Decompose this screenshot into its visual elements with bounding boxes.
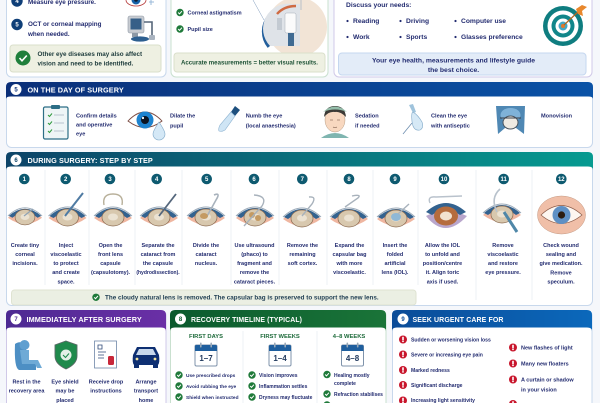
list: measurements	[176, 9, 242, 33]
list: urgent symptoms left: Severe or increasing eye pain	[411, 352, 483, 358]
header: immediately after surgery	[6, 310, 166, 331]
step 10: to unfold and	[425, 252, 460, 258]
column: 4-8 weeks: Healing mostly	[334, 373, 370, 379]
step 8: Expand the	[335, 243, 364, 249]
callout: eye health guide	[338, 53, 586, 75]
text: eye shield	[51, 380, 79, 403]
header: during surgery: 6	[14, 158, 18, 164]
column: first weeks: Vision improves	[259, 373, 298, 379]
text: clean the eye	[430, 114, 470, 129]
column: first days	[175, 334, 239, 401]
step 8: viscoelastic.	[333, 270, 366, 276]
step 2: viscoelastic	[50, 252, 82, 258]
header: during surgery	[6, 152, 593, 170]
step 4: 4	[155, 177, 159, 183]
list: urgent symptoms right	[509, 344, 574, 403]
text: numb the eye: (local anaesthesia)	[246, 123, 296, 129]
step 6	[234, 174, 276, 285]
callout: accurate measurements: Accurate measurements = better visual results.	[181, 59, 318, 66]
step 6: cataract pieces.	[234, 279, 276, 285]
step 2	[48, 174, 86, 285]
text: dilate the pupil: Dilate the	[170, 114, 195, 120]
step 1: incisions.	[12, 261, 38, 267]
column: first days: 1–7	[199, 354, 213, 363]
text: eye shield: may be	[56, 389, 74, 395]
step 2: and create	[52, 270, 80, 276]
text: dilate the pupil: pupil	[170, 123, 184, 129]
list: measurements: Pupil size	[188, 27, 213, 33]
text: confirm details: eye	[76, 132, 85, 138]
header: recovery timeline	[170, 310, 386, 331]
header: on the day of surgery: 5	[14, 88, 18, 94]
column: 4-8 weeks: 4–8 WEEKS	[333, 334, 365, 340]
list: urgent symptoms right: New flashes of light	[521, 346, 573, 352]
icon: car	[133, 347, 159, 368]
icon: recovery chair	[15, 340, 42, 370]
icon: drop instructions	[94, 341, 116, 368]
callout: capsular bag preserved	[12, 290, 416, 305]
step 12: Check wound	[543, 243, 579, 249]
text: sedation: if needed	[355, 123, 380, 129]
text: sedation: Sedation	[355, 114, 379, 120]
step 6: Use ultrasound	[234, 243, 275, 249]
text: sedation	[355, 114, 380, 129]
step 12: speculum.	[547, 280, 575, 286]
text: eye shield: Eye shield	[51, 380, 79, 386]
step 4: cataract from	[141, 252, 176, 258]
header: recovery timeline: RECOVERY TIMELINE (TYPICAL)	[191, 317, 302, 324]
step 12: Remove	[550, 270, 572, 276]
step 5: Divide the	[193, 243, 219, 249]
list: urgent symptoms left	[399, 336, 491, 403]
text: confirm details: and operative	[76, 122, 112, 128]
step 10: position/centre	[423, 261, 462, 267]
step 3: 3	[108, 177, 112, 183]
step 1: Create tiny	[11, 243, 40, 249]
step 1	[8, 174, 42, 267]
step 1: 1	[23, 177, 27, 183]
panel: immediately after surgery	[6, 310, 166, 403]
column: first weeks: Dryness may fluctuate	[259, 395, 313, 401]
step 8	[330, 174, 368, 276]
step 2: 2	[64, 177, 68, 183]
step 12: sealing and	[546, 252, 576, 258]
icon: target	[543, 5, 587, 46]
step 3: (capsulotomy).	[91, 270, 131, 276]
panel: during surgery step by step	[6, 152, 593, 306]
icon: OCT machine	[128, 16, 155, 42]
text: confirm details	[76, 113, 117, 138]
header: seek urgent care: 9	[401, 317, 405, 323]
step 5: OCT or corneal mapping	[11, 19, 102, 38]
list: needs: Work	[353, 34, 370, 41]
illustration: biometer	[253, 0, 327, 57]
header: immediately after surgery: IMMEDIATELY AFTER SURGERY	[26, 315, 142, 324]
text: dilate the pupil	[170, 114, 195, 129]
callout: eye health guide: the best choice.	[428, 67, 479, 74]
step 8: 8	[347, 177, 351, 183]
step 7: Remove the	[287, 243, 318, 249]
header: on the day of surgery	[6, 82, 593, 99]
icon: patient	[321, 106, 349, 138]
step 4: (hydrodissection).	[136, 270, 180, 276]
text: arrange transport: transport	[134, 389, 158, 395]
list: needs: Computer use	[461, 18, 506, 25]
text: rest in recovery area: Rest in the	[12, 380, 41, 386]
step 6: (phaco) to	[241, 252, 268, 258]
step 5	[187, 174, 225, 267]
list: urgent symptoms left: Sudden or worsening vision loss	[411, 337, 491, 343]
column: 4-8 weeks: complete	[334, 381, 356, 387]
step 10: 10	[441, 177, 448, 183]
step 10	[423, 174, 467, 285]
step 11: viscoelastic	[487, 252, 519, 258]
step 2: Inject	[59, 243, 73, 249]
panel: discuss your needs	[334, 0, 592, 77]
callout: other eye diseases: Other eye diseases may also affect	[38, 51, 143, 58]
text: rest in recovery area	[9, 380, 45, 395]
step 11: eye pressure.	[485, 270, 521, 276]
step 6: fragment and	[237, 261, 272, 267]
step 7: remaining	[289, 252, 316, 258]
step 6: remove the	[240, 270, 269, 276]
callout: capsular bag preserved: The cloudy natural lens is removed. The capsular bag is preserved to support the new lens.	[105, 294, 379, 301]
step 9	[377, 174, 415, 276]
text: drop instructions: Receive drop	[89, 380, 124, 386]
header: seek urgent care: SEEK URGENT CARE FOR	[412, 317, 504, 324]
list: urgent symptoms left: Marked redness	[411, 368, 450, 374]
step 9: artificial	[384, 261, 406, 267]
column: first weeks: 1–4	[273, 354, 287, 363]
callout: other eye diseases: vision and need to be identified.	[38, 60, 134, 68]
step 11	[483, 174, 521, 276]
list: needs: Glasses preference	[461, 34, 523, 41]
step 4: Separate the	[141, 243, 175, 249]
step 5: cataract	[195, 252, 217, 258]
step 5: OCT or corneal mapping: 5	[15, 23, 19, 29]
header: on the day of surgery: ON THE DAY OF SURGERY	[28, 85, 124, 94]
text: confirm details: Confirm details	[76, 113, 117, 119]
step 9: 9	[393, 177, 397, 183]
step 12: 12	[558, 177, 565, 183]
text: drop instructions: instructions	[90, 389, 122, 395]
step 12	[538, 174, 586, 286]
step 8: with more	[336, 261, 362, 267]
heading: discuss your needs: Discuss your needs:	[346, 2, 411, 9]
step 11: 11	[501, 177, 508, 183]
column: first weeks: Inflammation settles	[259, 384, 308, 390]
step 3: capsule	[100, 261, 121, 267]
column: first days: Shield when instructed	[186, 395, 239, 401]
step 3	[91, 174, 132, 276]
text: numb the eye	[246, 114, 296, 129]
step 1: corneal	[15, 252, 35, 258]
text: rest in recovery area: recovery area	[9, 389, 45, 395]
callout: eye health guide: Your eye health, measurements and lifestyle guide	[372, 58, 535, 64]
list: needs: Sports	[406, 34, 427, 41]
text: arrange transport	[134, 380, 158, 403]
list: measurements: Corneal astigmatism	[188, 10, 242, 16]
list: needs: Reading	[353, 18, 379, 25]
step 7: 7	[301, 177, 305, 183]
text: arrange transport: Arrange	[135, 380, 157, 386]
step 4	[136, 174, 180, 276]
panel: on the day of surgery	[6, 82, 593, 148]
column: 4-8 weeks	[323, 334, 383, 403]
step 2: space.	[57, 279, 75, 285]
step 10: axis if used.	[427, 279, 459, 285]
step 10: it. Align toric	[426, 270, 459, 276]
text: monovision: Monovision	[541, 114, 573, 120]
icon: eye pressure	[126, 0, 154, 6]
step 11: and restore	[488, 261, 518, 267]
panel: recovery timeline	[170, 310, 386, 403]
step 3: Open the	[99, 243, 122, 249]
step 7	[283, 174, 321, 267]
panel: seek urgent care	[392, 310, 592, 403]
step 5: 5	[205, 177, 209, 183]
step 9: lens (IOL).	[382, 270, 409, 276]
step 4: the capsule	[143, 261, 173, 267]
column: first days: Avoid rubbing the eye	[186, 384, 237, 390]
list: urgent symptoms right: A curtain or shadow	[521, 378, 574, 384]
step 9: Insert the	[383, 243, 407, 249]
icon: monovision	[496, 106, 525, 134]
step 6: 6	[252, 177, 256, 183]
step 5: nucleus.	[195, 261, 218, 267]
callout: accurate measurements	[174, 53, 325, 72]
step 10: Allow the IOL	[425, 243, 461, 249]
icon: numbing dropper	[219, 106, 240, 131]
step 12: give medication.	[539, 261, 583, 267]
panel: measurements	[171, 0, 328, 77]
column: first days: Use prescribed drops	[186, 373, 236, 379]
icon: antiseptic dropper	[403, 104, 423, 134]
column: 4-8 weeks: Refraction stabilises	[334, 392, 383, 398]
column: first weeks	[248, 334, 313, 401]
column: first days: FIRST DAYS	[189, 334, 223, 340]
step 8: capsular bag	[333, 252, 366, 258]
header: seek urgent care	[392, 310, 592, 331]
list: needs: Driving	[406, 18, 429, 25]
text: drop instructions	[89, 380, 124, 395]
step 7: soft cortex.	[288, 261, 318, 267]
column: 4-8 weeks: 4–8	[346, 354, 360, 363]
step 5: OCT or corneal mapping: when needed.	[27, 31, 70, 38]
list: urgent symptoms right: in your vision	[521, 388, 557, 394]
list: needs	[346, 18, 523, 41]
column: first weeks: FIRST WEEKS	[260, 334, 300, 340]
step 2: to protect	[53, 261, 79, 267]
icon: eye shield	[55, 341, 77, 369]
list: urgent symptoms right: Many new floaters	[521, 362, 569, 368]
panel: assessment steps	[6, 0, 166, 77]
step 9: folded	[387, 252, 403, 258]
header: immediately after surgery: 7	[14, 317, 18, 323]
step 5: OCT or corneal mapping: OCT or corneal mapping	[28, 21, 102, 28]
step 11: Remove	[492, 243, 514, 249]
text: clean the eye: with antiseptic	[430, 123, 470, 129]
text: clean the eye: Clean the eye	[431, 114, 467, 120]
icon: clipboard	[44, 105, 68, 139]
callout: other eye diseases	[10, 45, 161, 72]
text: numb the eye: Numb the eye	[246, 114, 282, 120]
list: urgent symptoms left: Significant discharge	[411, 383, 463, 389]
step 3: front lens	[98, 252, 123, 258]
header: recovery timeline: 8	[179, 317, 183, 323]
header: during surgery: DURING SURGERY: STEP BY STEP	[28, 156, 153, 165]
icon: dilating eye	[128, 112, 165, 140]
